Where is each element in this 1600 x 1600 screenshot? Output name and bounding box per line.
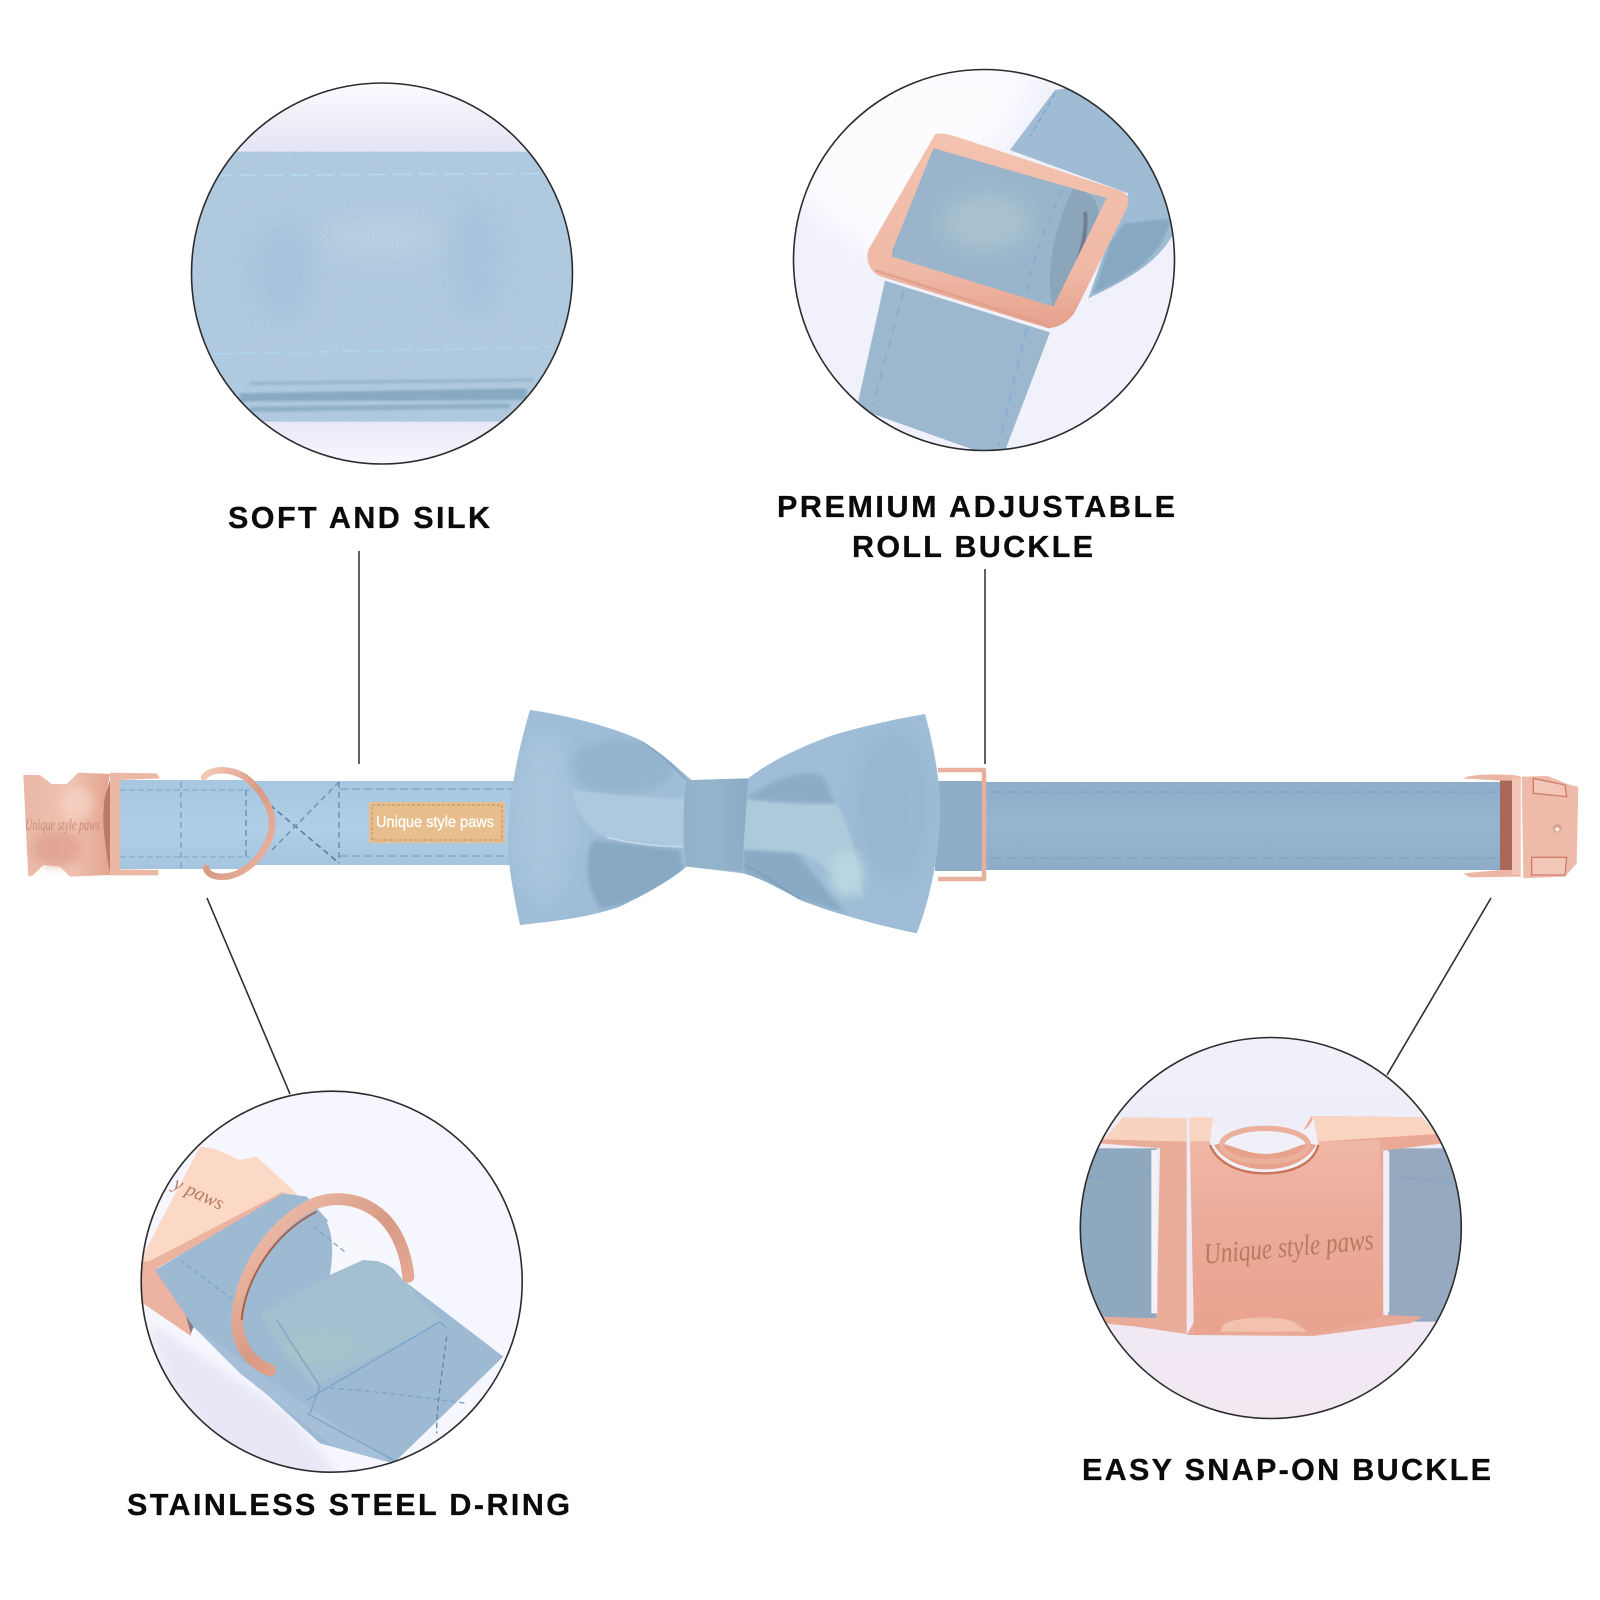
connector line: D-ring xyxy=(207,898,290,1094)
brand label: Unique style paws xyxy=(376,814,494,831)
lower strap xyxy=(857,281,1050,460)
collar strap: left xyxy=(119,780,525,869)
strap xyxy=(155,1193,503,1463)
bow: right wing shading xyxy=(692,773,865,912)
bow: left wing shading xyxy=(513,730,688,908)
strap shadow xyxy=(155,1331,332,1471)
heading: soft and silk: SOFT AND SILK xyxy=(228,501,490,535)
right end buckle xyxy=(1463,774,1578,878)
brand label xyxy=(369,802,505,843)
left buckle arm xyxy=(1100,1117,1187,1334)
bottom tab xyxy=(1220,1318,1307,1332)
fold shadow xyxy=(240,378,533,412)
bow tie xyxy=(508,710,940,934)
heading: premium adjustable roll buckle: PREMIUM ADJUSTABLE xyxy=(777,490,1175,524)
panel: fabric close-up circle xyxy=(187,83,580,465)
folded loop xyxy=(380,1262,404,1280)
connector line: soft and silk xyxy=(358,551,360,764)
right buckle arm xyxy=(1187,1116,1443,1336)
buckle body xyxy=(143,1146,298,1262)
connector line: roll buckle xyxy=(984,569,986,764)
top notch with ring xyxy=(1210,1117,1318,1172)
centre plate xyxy=(1189,1118,1383,1335)
left strap xyxy=(1077,1148,1157,1318)
left snap buckle: Unique style paws xyxy=(25,817,100,834)
panel: D-ring close-up circle: y paws xyxy=(168,1172,227,1215)
panel: roll buckle close-up circle xyxy=(790,60,1187,460)
rolled strap xyxy=(888,143,1110,312)
back strap xyxy=(1010,88,1172,298)
D-ring xyxy=(204,770,272,877)
right strap xyxy=(1388,1148,1468,1322)
heading: premium adjustable roll buckle xyxy=(777,490,1175,564)
inner gap of ring xyxy=(326,1222,379,1275)
connector line: snap-on buckle xyxy=(1387,898,1491,1075)
bow: center knot xyxy=(684,778,748,872)
panel: D-ring close-up circle xyxy=(133,1090,528,1477)
engraving: Unique style paws xyxy=(1203,1224,1375,1271)
panel: collar xyxy=(23,700,1578,940)
roll buckle on collar xyxy=(938,770,984,879)
buckle frame xyxy=(133,1192,283,1336)
stitching: top seam xyxy=(213,173,550,176)
heading: easy snap-on buckle: EASY SNAP-ON BUCKLE xyxy=(1082,1453,1491,1487)
rectangular frame xyxy=(867,133,1128,328)
stitching lines xyxy=(180,1227,467,1460)
left snap buckle xyxy=(23,773,160,877)
heading: stainless steel D-ring: STAINLESS STEEL D-RING xyxy=(127,1488,570,1522)
stitching: bottom seam xyxy=(213,347,553,354)
panel: snap-on buckle close-up circle xyxy=(1077,1035,1468,1421)
ring xyxy=(237,1199,408,1370)
collar strap: right xyxy=(935,781,1504,871)
heading: premium adjustable roll buckle: ROLL BUCKLE xyxy=(852,530,1093,564)
